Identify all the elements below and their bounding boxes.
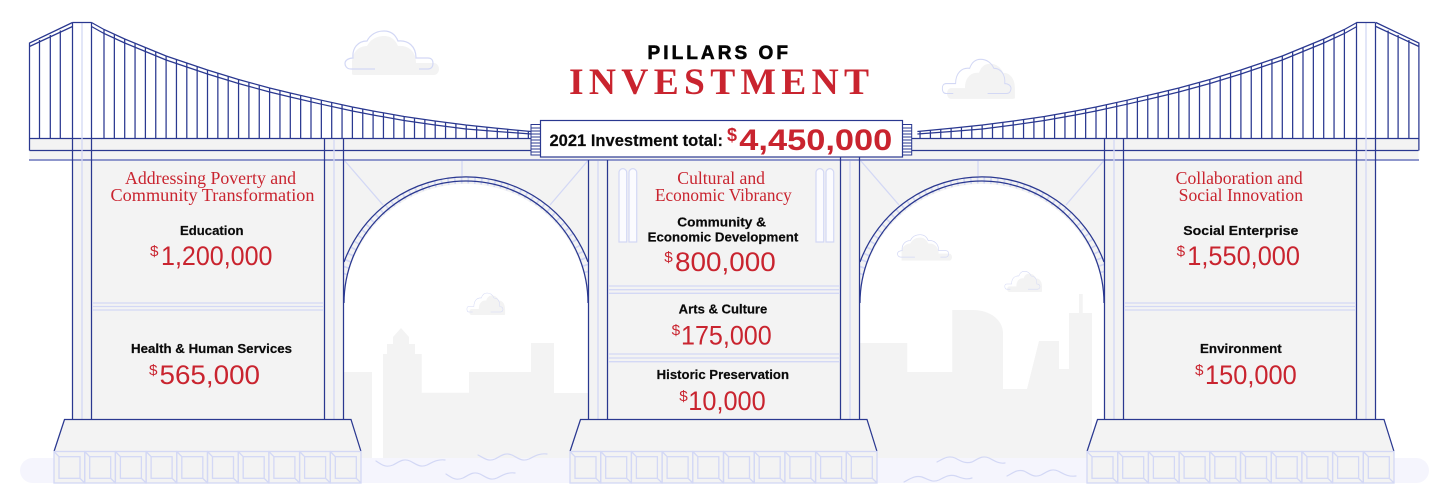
pier base: left: [54, 420, 361, 483]
item: Social Enterprise: [1177, 223, 1300, 271]
heading: Cultural and Economic Vibrancy: Cultural and: [677, 168, 765, 188]
cloud: top right: [942, 59, 1015, 99]
plaque text: $: [727, 125, 737, 145]
cloud: right arch lower: [1005, 271, 1042, 292]
skyline: left arch: [344, 328, 588, 458]
item: Environment: [1195, 341, 1297, 390]
pier base: center: [570, 420, 877, 483]
decorative columns: [619, 169, 834, 242]
heading: Addressing Poverty: Community Transformation: [110, 185, 315, 205]
cloud: right arch upper: [898, 235, 952, 261]
pier: center: [588, 157, 860, 420]
pier: right: [1104, 22, 1376, 420]
item: Environment: $: [1195, 362, 1204, 379]
arch: right: [860, 160, 1104, 306]
title: [569, 43, 869, 103]
item: Health & Human Services: 565,000: [160, 360, 260, 390]
item: Education: [150, 223, 272, 271]
item: Community & Economic Development: Community &: [677, 215, 766, 230]
pier: left: [72, 22, 344, 420]
item: Arts & Culture: $: [672, 322, 681, 339]
item: Environment: Environment: [1200, 341, 1282, 356]
item: Health & Human Services: [131, 341, 292, 390]
heading: Cultural and Economic Vibrancy: [655, 168, 792, 205]
item: Education: Education: [180, 223, 244, 238]
item: Historic Preservation: $: [679, 388, 688, 405]
plaque box: [540, 120, 902, 157]
item: Community & Economic Development: [648, 215, 799, 277]
heading: Cultural and Economic Vibrancy: Economic Vibrancy: [655, 185, 792, 205]
plaque text: [550, 124, 892, 157]
suspension cables and hangers: left: [30, 22, 531, 150]
investment total plaque: [531, 120, 912, 157]
item: Historic Preservation: Historic Preservation: [657, 367, 789, 382]
heading: Collaboration and Social Innovation: Collaboration and: [1176, 168, 1303, 188]
item: Historic Preservation: 10,000: [688, 386, 766, 416]
item: Community & Economic Development: Economic Development: [648, 230, 799, 245]
title: INVESTMENT: [569, 62, 869, 103]
cloud: top left: [345, 31, 439, 75]
heading: Addressing Poverty: [110, 168, 315, 205]
arch: left: [344, 160, 588, 306]
skyline: right arch: [860, 294, 1092, 458]
item: Social Enterprise: $: [1177, 243, 1186, 260]
pier base: right: [1087, 420, 1394, 483]
item: Community & Economic Development: 800,000: [675, 247, 776, 277]
item: Community & Economic Development: $: [664, 249, 673, 266]
plaque text: 2021 Investment total:: [550, 131, 723, 150]
item: Arts & Culture: Arts & Culture: [679, 301, 767, 316]
item: Education: $: [150, 243, 159, 260]
item: Health & Human Services: Health & Human Services: [131, 341, 292, 356]
water band: [20, 458, 1429, 483]
heading: Collaboration and Social Innovation: [1176, 168, 1303, 205]
item: Arts & Culture: [672, 301, 772, 350]
item: Arts & Culture: 175,000: [681, 320, 772, 350]
plaque text: 4,450,000: [739, 124, 892, 157]
item: Health & Human Services: $: [149, 362, 158, 379]
plaque connectors: [531, 124, 912, 155]
item: Education: 1,200,000: [161, 241, 272, 271]
item: Environment: 150,000: [1205, 360, 1297, 390]
cloud: left arch: [467, 293, 505, 315]
title: PILLARS OF: [648, 43, 788, 64]
heading: Collaboration and Social Innovation: Social Innovation: [1179, 185, 1303, 205]
water waves: [376, 454, 1076, 482]
heading: Addressing Poverty: Addressing Poverty and: [125, 168, 296, 188]
item: Historic Preservation: [657, 367, 789, 416]
item: Social Enterprise: Social Enterprise: [1183, 223, 1298, 238]
bridge deck: [29, 138, 1419, 160]
item: Social Enterprise: 1,550,000: [1187, 241, 1300, 271]
suspension cables and hangers: right: [917, 22, 1419, 150]
